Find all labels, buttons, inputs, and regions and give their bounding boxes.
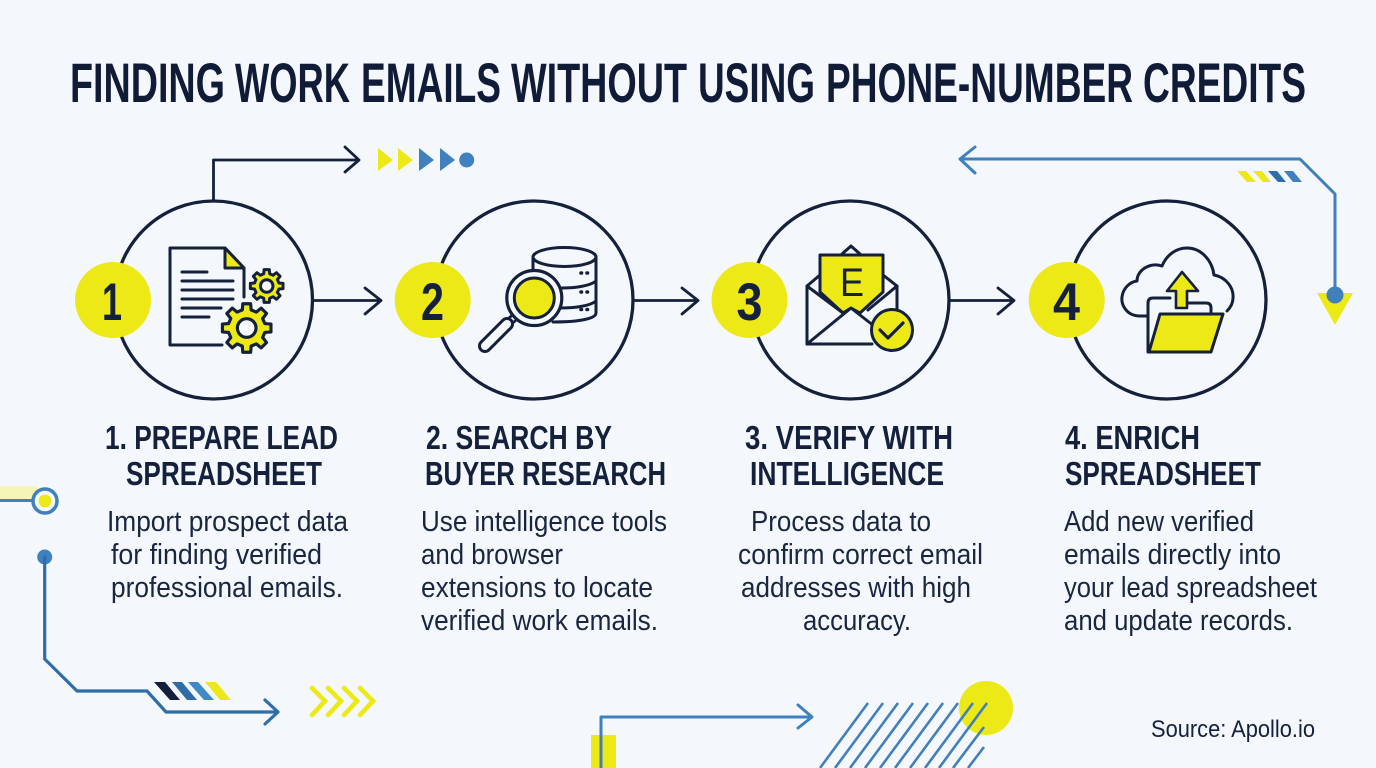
step 2 heading: BUYER RESEARCH [425, 455, 666, 492]
icon: cloud upload folder [1122, 248, 1233, 352]
decorative stripes bottom left [154, 682, 231, 700]
title: PHONE-NUMBER [826, 51, 1133, 114]
icon: document with gears [170, 248, 283, 352]
step 4 heading [1065, 419, 1261, 492]
step 4 description: and update records. [1064, 605, 1293, 637]
step 3 number badge: 3 [736, 273, 762, 332]
step 3 description: accuracy. [803, 605, 911, 637]
step 4 heading: SPREADSHEET [1065, 455, 1261, 492]
step 1 number badge [75, 262, 151, 338]
step 4 description [1064, 506, 1317, 637]
step 1 description [107, 506, 349, 604]
icon: magnifier over database [485, 248, 596, 346]
step 2 description: and browser [421, 539, 563, 571]
yellow block bottom [591, 735, 616, 768]
source note: Source: Apollo.io [1151, 716, 1315, 743]
step 3 heading: INTELLIGENCE [750, 455, 944, 492]
step 2 number badge [395, 262, 471, 338]
arrow: step 2 to step 3 [635, 288, 698, 314]
step 1 description: Import prospect data [107, 506, 349, 538]
step 3 description: Process data to [751, 506, 931, 538]
panel: step 3 verify with intelligence [712, 201, 983, 637]
icon: envelope with check [807, 246, 912, 350]
step 2 description [421, 506, 667, 637]
step 4 description: Add new verified [1064, 506, 1254, 538]
title: WITHOUT [511, 51, 687, 114]
step 4 number badge [1029, 262, 1105, 338]
step 3 number badge [712, 262, 788, 338]
arrow: blue line bottom center [601, 705, 812, 768]
step 2 description: verified work emails. [421, 605, 658, 637]
title: USING [698, 51, 815, 114]
arrow: blue circuit line bottom left [37, 550, 278, 724]
title: EMAILS [361, 51, 501, 114]
title: WORK [235, 51, 350, 114]
step 1 description: professional emails. [111, 572, 343, 604]
step 2 number badge: 2 [421, 273, 444, 332]
step 2 heading [425, 419, 666, 492]
step 3 circle [751, 201, 949, 399]
step 3 description [738, 506, 983, 637]
arrow: blue return line top right [960, 147, 1335, 295]
arrow: step 1 to step 2 [313, 288, 381, 314]
step 1 heading: SPREADSHEET [126, 455, 322, 492]
icon: envelope with check: E [840, 261, 864, 305]
step 3 heading: 3. VERIFY WITH [745, 419, 953, 456]
step 3 description: confirm correct email [738, 539, 983, 571]
step 2 description: Use intelligence tools [421, 506, 667, 538]
arrow: step 3 to step 4 [950, 288, 1014, 314]
panel: step 1 prepare lead spreadsheet [75, 201, 349, 604]
marker: yellow triangle with blue dot [1317, 286, 1353, 325]
step 4 circle [1068, 201, 1266, 399]
panel: step 4 enrich spreadsheet [1029, 201, 1317, 637]
step 1 heading [105, 419, 338, 492]
decorative stripes top right [1237, 171, 1302, 182]
step 4 number badge: 4 [1053, 273, 1080, 332]
decorative triangles and dot [378, 148, 474, 171]
step 3 heading [745, 419, 953, 492]
step 2 description: extensions to locate [421, 572, 653, 604]
step 2 circle [435, 201, 633, 399]
decorative chevrons [312, 688, 373, 715]
step 1 heading: 1. PREPARE LEAD [105, 419, 338, 456]
step 4 description: emails directly into [1064, 539, 1281, 571]
step 1 number badge: 1 [102, 273, 122, 332]
yellow circle bottom right [959, 681, 1013, 735]
step 4 heading: 4. ENRICH [1065, 419, 1200, 456]
step 3 description: addresses with high [741, 572, 971, 604]
arrow: from step 1 up and right [214, 147, 359, 200]
step 2 heading: 2. SEARCH BY [426, 419, 612, 456]
title: FINDING [70, 51, 225, 114]
step 1 circle [114, 201, 312, 399]
diagonal hatch lines [820, 703, 987, 768]
step 4 description: your lead spreadsheet [1064, 572, 1317, 604]
left connector node [0, 486, 57, 513]
step 1 description: for finding verified [111, 539, 322, 571]
panel: step 2 search by buyer research [395, 201, 667, 637]
